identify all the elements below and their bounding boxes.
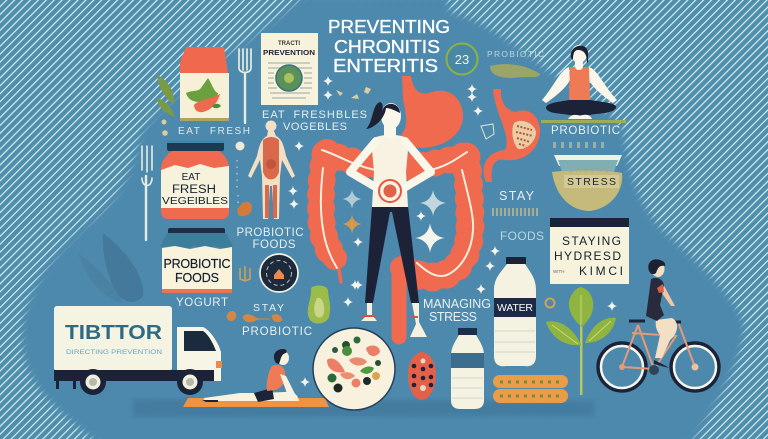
label: eat freshbles vogebles <box>262 109 367 133</box>
label: managing stress: MANAGING <box>423 297 491 311</box>
small marks under label <box>553 142 605 148</box>
label: eat freshbles vogebles: VOGEBLES <box>283 121 347 133</box>
food plate <box>313 328 395 410</box>
illustration: small stomach <box>484 89 540 182</box>
large water bottle: WATER <box>497 302 533 314</box>
label: managing stress: STRESS <box>429 310 477 324</box>
label: managing stress <box>423 297 491 324</box>
cyclist <box>598 259 719 391</box>
icon: vegetable jar: FRESH <box>172 184 216 196</box>
icon: green sprig <box>157 75 175 117</box>
title: PREVENTING <box>328 17 450 37</box>
title: ENTERITIS <box>333 56 438 76</box>
small outline icon <box>481 124 494 139</box>
icon: fork two <box>142 146 152 240</box>
badge: 23: 23 <box>455 52 469 67</box>
icon: plant <box>546 287 616 395</box>
kimchi card <box>550 218 629 284</box>
shirt <box>372 135 408 207</box>
leg <box>655 318 677 358</box>
article card: TRACTI <box>278 41 300 47</box>
illustration: large stomach <box>401 76 463 148</box>
icon: round dial <box>260 254 298 292</box>
kimchi card: HYDRESD <box>554 249 621 263</box>
head <box>652 261 664 277</box>
yoga woman <box>541 45 626 123</box>
kimchi card: WITH <box>553 269 564 274</box>
wheels <box>598 343 646 391</box>
delivery truck: TIBTTOR <box>65 322 163 344</box>
icon: fork one <box>239 49 251 123</box>
icon: small wheat <box>240 266 250 281</box>
legs <box>365 206 419 303</box>
icon: vegetable jar: VEGEIBLES <box>162 195 228 207</box>
bowl with stress label: SAVING <box>568 167 610 174</box>
torso <box>646 278 664 321</box>
icon: milk carton <box>180 47 229 121</box>
background leaves <box>78 233 143 303</box>
tummy symbol <box>379 180 401 202</box>
icon: ring symbol <box>546 298 554 308</box>
icon: green pepper <box>308 286 330 324</box>
frame <box>622 322 695 369</box>
icon: vegetable jar <box>161 140 229 219</box>
label: probiotic lower: PROBIOTIC <box>242 326 312 338</box>
kimchi card: STAYING <box>562 234 621 248</box>
icon: vegetable jar: EAT <box>182 172 200 183</box>
bowl with stress label <box>552 155 622 211</box>
top probiotic label: PROBIOTIC <box>487 49 544 59</box>
label: eat freshbles vogebles: EAT FRESHBLES <box>262 109 367 121</box>
arms <box>350 141 431 192</box>
delivery truck: DIRECTING PREVENTION <box>66 349 162 356</box>
small water bottle <box>451 328 484 409</box>
probiotic foods label: FOODS <box>252 239 296 251</box>
label: foods: FOODS <box>500 229 544 243</box>
probiotic foods jar <box>160 228 233 293</box>
shoes <box>361 303 427 337</box>
article card: PREVENTION <box>263 48 315 57</box>
central woman figure <box>350 102 431 337</box>
label: stay: STAY <box>253 302 284 314</box>
kimchi card: KIMCI <box>579 264 623 278</box>
title: CHRONITIS <box>334 37 440 57</box>
small sparkles by pepper <box>300 280 363 387</box>
orange supplement pills <box>493 375 568 403</box>
badge: 23 <box>446 44 478 74</box>
top probiotic label <box>487 49 544 78</box>
probiotic foods label: PROBIOTIC <box>236 227 304 239</box>
ground shadow <box>133 399 594 417</box>
probiotic foods label <box>236 227 304 251</box>
icon: human body with organs <box>248 120 295 219</box>
sparkles left of the colon <box>236 141 304 216</box>
squiggle text patch <box>492 208 539 216</box>
neck and head <box>384 122 396 138</box>
probiotic foods jar: FOODS <box>175 271 219 285</box>
red organ with dots <box>408 352 436 400</box>
article card <box>261 33 318 105</box>
title <box>328 17 450 76</box>
large water bottle <box>494 257 536 366</box>
label: probiotic under yoga: PROBIOTIC <box>551 125 620 137</box>
label: eat fresh: EAT FRESH <box>178 126 250 137</box>
label: yogurt: YOGURT <box>176 297 228 309</box>
illustration: colon <box>321 150 473 337</box>
small dots near title <box>162 76 371 136</box>
probiotic foods jar: PROBIOTIC <box>164 257 230 271</box>
label: stay: STAY <box>499 189 535 203</box>
delivery truck <box>54 306 222 395</box>
arm <box>657 284 675 306</box>
hair <box>366 102 400 129</box>
sparkle near cyclist <box>607 301 617 311</box>
orange food bits <box>227 311 282 322</box>
yoga mat and stretching woman <box>183 349 329 407</box>
bowl with stress label: STRESS <box>567 176 616 188</box>
sparkles inside colon <box>342 84 500 307</box>
